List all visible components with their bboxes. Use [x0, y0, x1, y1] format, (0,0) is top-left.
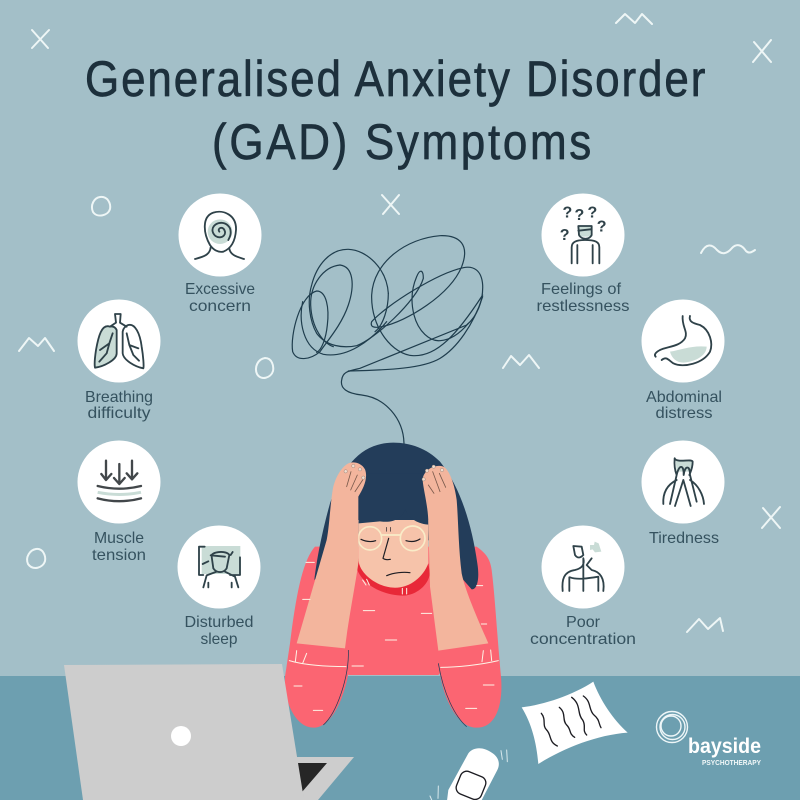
hair [314, 443, 478, 589]
label: breathing difficulty: difficulty [88, 405, 150, 422]
face [358, 520, 428, 588]
label: disturbed sleep: Disturbed [184, 614, 254, 631]
label: muscle tension: Muscle [94, 530, 144, 547]
icon: stomach [655, 316, 711, 365]
tangled thought scribble [292, 236, 483, 443]
icon: person with question marks: ? [587, 204, 597, 221]
label: abdominal distress: distress [656, 405, 712, 422]
symptom: tiredness [642, 440, 724, 547]
sleeve shadow edges [323, 650, 467, 727]
right arm and hand [423, 466, 488, 651]
label: poor concentration: concentration [530, 631, 636, 648]
symptom: disturbed sleep [178, 526, 260, 648]
decorative doodles [19, 14, 780, 632]
symptom: excessive concern [178, 194, 262, 315]
label: tiredness: Tiredness [649, 530, 719, 547]
icon: person with question marks: ? [597, 218, 607, 235]
icon: head with spiral [195, 212, 244, 259]
laptop [64, 664, 354, 800]
symptom: poor concentration [530, 526, 636, 648]
title: (GAD) Symptoms [212, 113, 591, 170]
collar [356, 558, 430, 596]
label: feelings of restlessness: restlessness [536, 298, 630, 315]
icon: person rubbing eyes [663, 458, 704, 506]
icon: person with question marks: ? [562, 204, 572, 221]
icon: arrows pressing on layers [98, 461, 141, 501]
title: Generalised Anxiety Disorder [85, 50, 705, 107]
icon: person with question marks: ? [560, 227, 570, 244]
icon: puzzle person [562, 542, 604, 591]
label: breathing difficulty: Breathing [85, 389, 153, 406]
paper with scribbled lines [522, 682, 628, 764]
table surface [0, 676, 800, 800]
symptom: breathing difficulty [78, 300, 160, 422]
label: excessive concern: Excessive [185, 281, 255, 298]
glasses [358, 526, 425, 551]
logo: bayside psychotherapy: bayside [688, 735, 761, 758]
label: disturbed sleep: sleep [200, 631, 238, 648]
icon: person with question marks: ? [574, 207, 584, 224]
smartphone on table [430, 748, 507, 800]
fringe [359, 473, 428, 525]
label: feelings of restlessness: Feelings of [541, 281, 622, 298]
symptom: feelings of restlessness [536, 194, 630, 315]
closed eyes, nose and mouth [361, 527, 420, 576]
jumper [285, 547, 501, 728]
woman at desk holding her head [285, 443, 501, 728]
label: muscle tension: tension [92, 547, 146, 564]
jumper detail lines [289, 562, 498, 710]
icon: person awake on pillow [199, 546, 240, 587]
symptom: abdominal distress [642, 300, 724, 422]
left arm and hand [297, 462, 366, 648]
logo: bayside psychotherapy [656, 712, 761, 767]
symptom: muscle tension [78, 440, 160, 564]
icon: person with question marks [560, 204, 607, 263]
fingers and nails [347, 472, 446, 493]
logo: bayside psychotherapy: PSYCHOTHERAPY [702, 760, 761, 767]
label: excessive concern: concern [189, 298, 251, 315]
label: poor concentration: Poor [566, 614, 601, 631]
label: abdominal distress: Abdominal [646, 389, 722, 406]
icon: lungs [95, 314, 144, 368]
title [85, 50, 705, 170]
